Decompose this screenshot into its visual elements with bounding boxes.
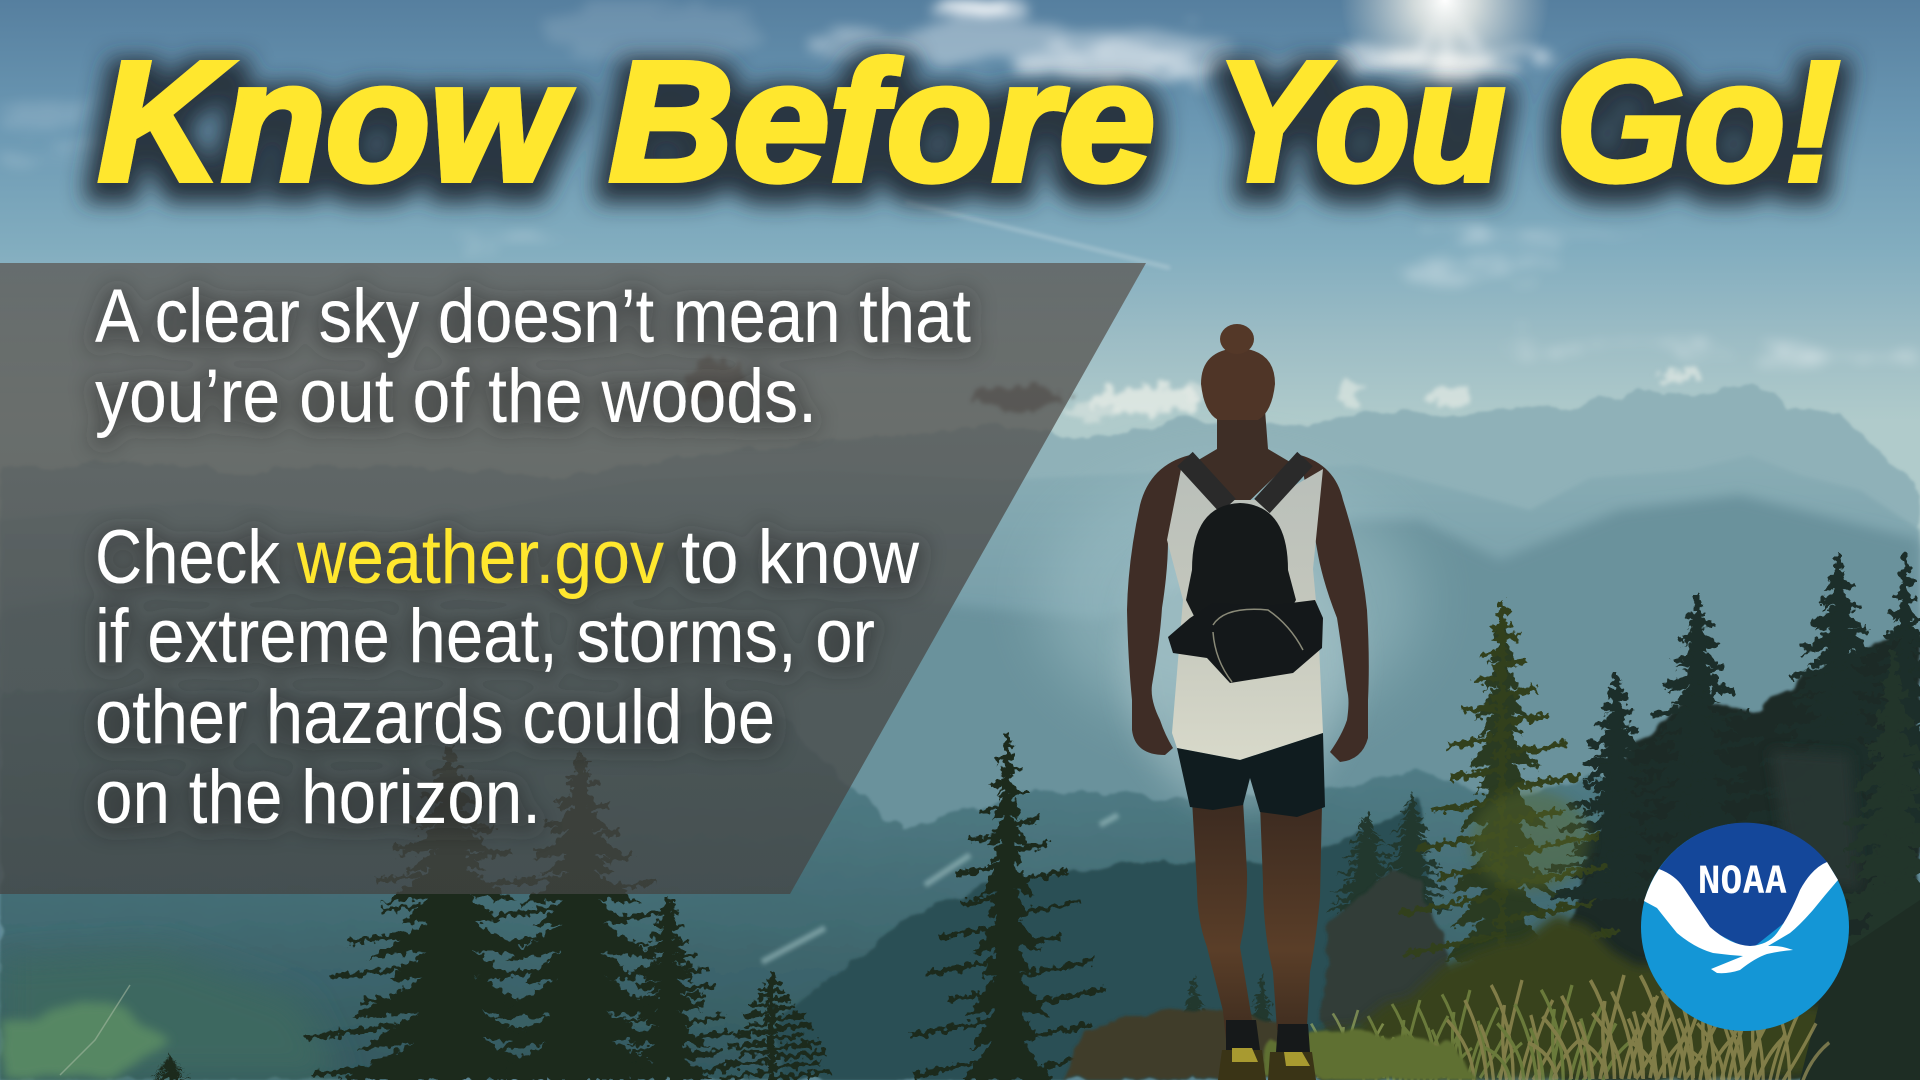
main right tree [1396,600,1617,960]
tuft [1390,990,1522,1078]
light valley haze [1040,470,1420,730]
second paragraph: weather.gov [296,515,664,600]
tuft [1628,968,1786,1080]
tree core [1865,554,1920,824]
dark lower right tree base [1800,900,1920,1080]
village road [60,985,130,1075]
foreground big tree [1801,650,1920,1080]
sky clouds [0,0,1920,362]
first paragraph: you’re out of the woods. [95,354,817,439]
title: Know [98,27,573,217]
blue ridge [0,495,1920,1080]
tree branches [1801,650,1920,1080]
hiker [1127,324,1369,1080]
tree branches [456,750,715,1080]
backpack straps [1185,459,1305,506]
tree branches [1854,554,1920,824]
tree core [962,733,1052,1080]
dark forest slope [780,800,1440,1080]
tuft [1484,985,1629,1080]
pack trim [1213,609,1303,682]
second paragraph: Check [95,515,281,600]
tree branches [306,745,604,1080]
title: Before [609,27,1155,217]
grass tufts [1286,968,1829,1080]
contrail [906,202,1170,268]
logo wordmark: NOAA [1698,859,1787,902]
right conifers [1547,554,1920,899]
body text [95,274,971,840]
logo disc [1641,823,1849,1031]
first paragraph: A clear sky doesn’t mean that [95,274,971,359]
singlet [1167,464,1323,760]
tuft [1434,980,1579,1080]
tree [1324,810,1410,912]
right cliff [1770,750,1860,890]
title [98,27,1840,217]
hair bun [1220,324,1254,354]
neck and upper back [1195,410,1290,510]
lower valley [0,768,1920,1080]
grass at hiker's feet [1260,1030,1480,1080]
left rock [1320,870,1470,1030]
logo bird [1644,862,1838,973]
tree [1172,975,1216,1065]
tuft [1528,975,1686,1079]
title: You [1217,27,1505,217]
shoe highlights [1232,1048,1310,1066]
tuft [1286,1010,1405,1078]
tree core [339,745,559,1080]
tuft [1684,985,1829,1080]
right arm [1300,455,1369,762]
second paragraph: if extreme heat, storms, or [95,594,875,679]
low clouds on horizon [687,360,1702,419]
farmland [0,1000,170,1080]
glow behind hiker [1125,510,1355,810]
left valley floor [0,950,340,1080]
backpack [1186,503,1296,620]
legs [1192,800,1322,1050]
tree [1240,975,1284,1065]
river glints [762,815,1118,962]
trees left of hiker [150,733,1112,1080]
olive highlights [1470,790,1590,890]
socks [1226,1020,1310,1052]
shoes [1218,1050,1316,1080]
sky [0,80,1920,610]
rock faces [1320,750,1860,1030]
far mountain range [1024,383,1920,528]
tree core [1758,555,1918,855]
second paragraph [95,515,920,840]
second paragraph: other hazards could be [95,675,775,760]
tree core [1561,674,1671,899]
tree branches [1547,674,1691,899]
second paragraph: on the horizon. [95,755,541,840]
tree [1370,792,1454,912]
title: Go! [1556,27,1840,217]
tree branches [717,972,832,1080]
tree core [1442,600,1562,960]
second paragraph: to know [681,515,920,600]
NOAA logo [1641,823,1849,1031]
hazy mid mountains [0,455,1920,1080]
left arm [1127,455,1190,755]
logo dark upper area [1650,823,1838,950]
dark forest mass right [1560,630,1920,1080]
tuft [1340,1000,1472,1080]
tree branches [1396,600,1617,960]
tuft [1578,970,1736,1078]
hip pack [1168,600,1323,683]
sun [1346,0,1544,88]
tree branches [1746,555,1920,855]
shorts [1177,733,1325,817]
tree core [623,895,713,1080]
tree core [1632,593,1762,893]
first paragraph [95,274,971,439]
ground scrub [1320,920,1920,1080]
tree core [1808,650,1920,1080]
rock at hiker's feet [1060,1010,1320,1080]
text panel [0,263,1146,894]
distant trees right of hiker [1172,792,1454,1065]
tree branches [1610,593,1792,893]
tree branches [604,895,738,1080]
tree branches [910,733,1112,1080]
tree core [150,1055,190,1080]
tree core [480,750,680,1080]
hair [1201,348,1275,420]
